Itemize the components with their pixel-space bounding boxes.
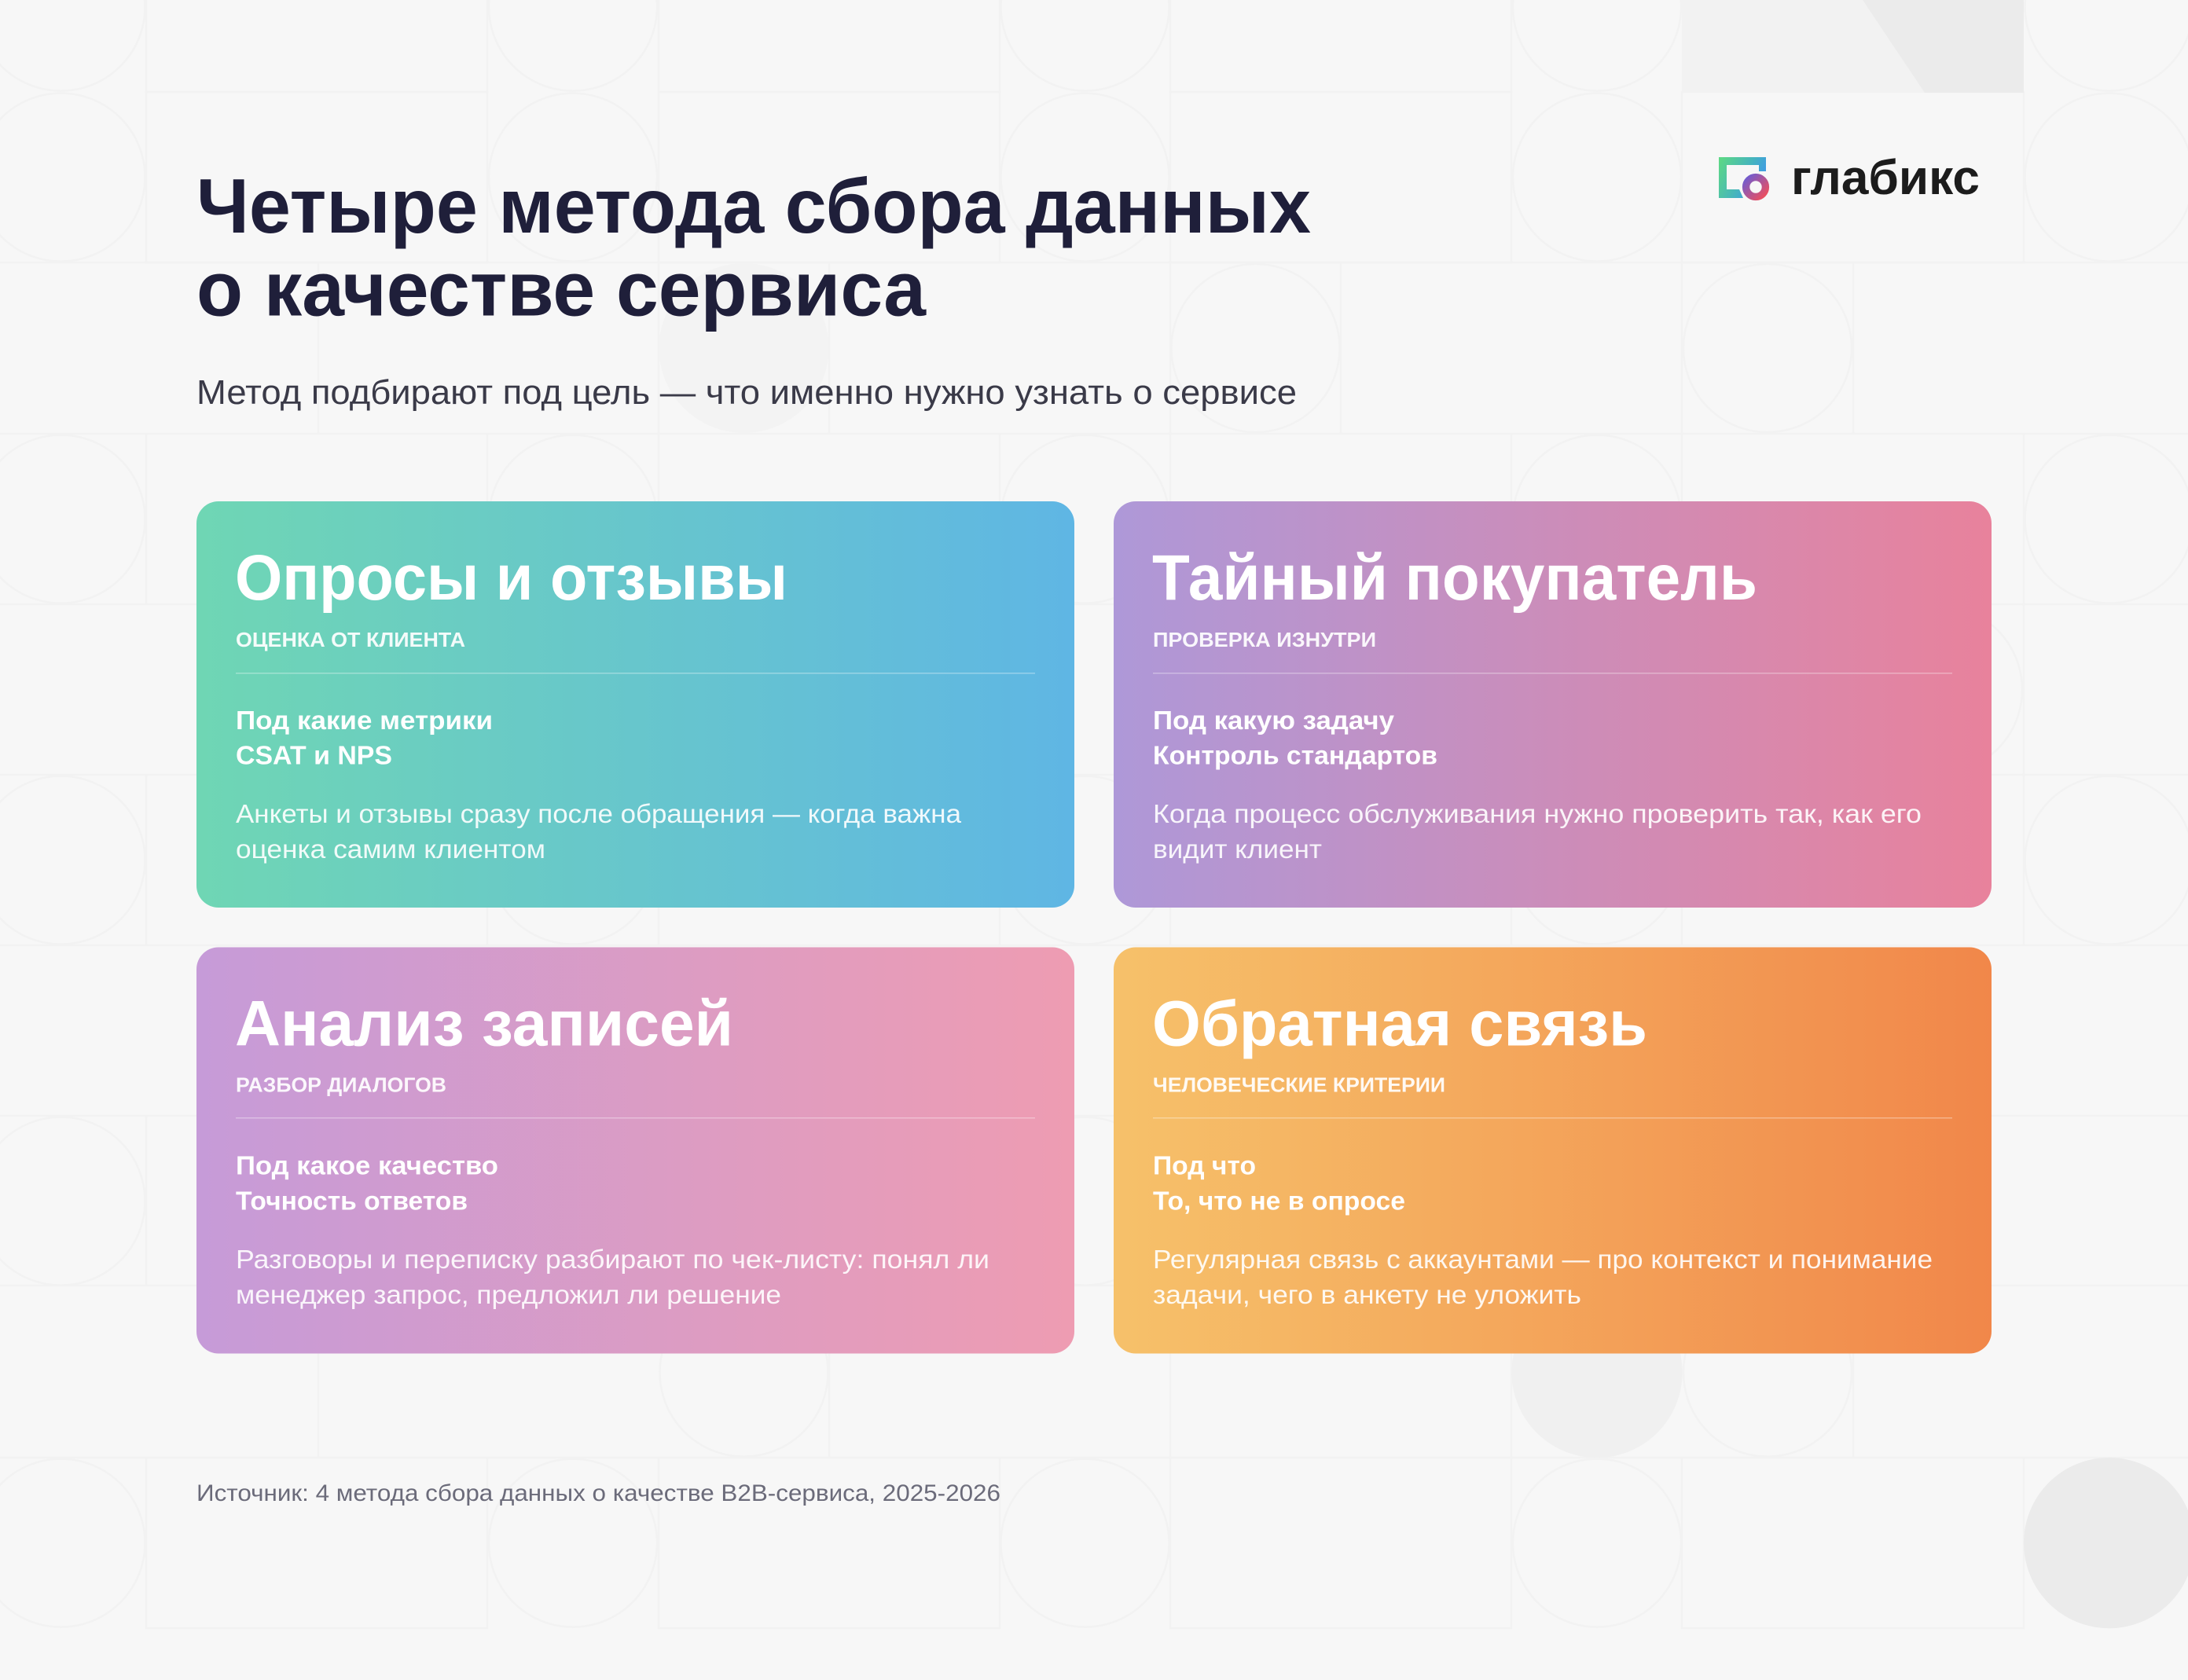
card description: видит клиент: [1153, 834, 1322, 864]
title: Четыре метода сбора данных: [196, 163, 1311, 249]
quality value: Точность ответов: [236, 1187, 468, 1215]
card description: оценка самим клиентом: [236, 834, 545, 864]
subtitle: Метод подбирают под цель — что именно нужно узнать о сервисе: [196, 373, 1297, 412]
card description: задачи, чего в анкету не уложить: [1153, 1280, 1581, 1309]
card description: менеджер запрос, предложил ли решение: [236, 1280, 781, 1309]
card heading: Опросы и отзывы: [235, 542, 787, 614]
title: [196, 163, 1311, 332]
quality label: Под какое качество: [236, 1150, 498, 1180]
logo wordmark: глабикс: [1791, 151, 1980, 205]
card description: Регулярная связь с аккаунтами — про контекст и понимание: [1153, 1245, 1933, 1274]
card subheading: РАЗБОР ДИАЛОГОВ: [236, 1073, 446, 1097]
purpose label: Под что: [1153, 1150, 1256, 1180]
card description: [236, 799, 962, 864]
task value: Контроль стандартов: [1153, 740, 1437, 770]
panel: mystery shopper: [1114, 501, 1992, 908]
card description: Когда процесс обслуживания нужно проверить так, как его: [1153, 799, 1922, 828]
card heading: Тайный покупатель: [1152, 542, 1757, 614]
source note: Источник: 4 метода сбора данных о качестве B2B-сервиса, 2025-2026: [196, 1480, 1000, 1506]
card description: [236, 1245, 989, 1309]
logo: [1719, 151, 1980, 205]
title: о качестве сервиса: [196, 245, 927, 332]
purpose value: То, что не в опросе: [1153, 1187, 1405, 1215]
card heading: Анализ записей: [235, 989, 733, 1059]
panel: recording analysis: [196, 948, 1074, 1353]
card subheading: ОЦЕНКА ОТ КЛИЕНТА: [236, 628, 465, 651]
panel: surveys and reviews: [196, 501, 1074, 908]
card subheading: ЧЕЛОВЕЧЕСКИЕ КРИТЕРИИ: [1153, 1073, 1445, 1097]
card subheading: ПРОВЕРКА ИЗНУТРИ: [1153, 628, 1376, 651]
card description: [1153, 1245, 1933, 1309]
icon: logo mark: [1719, 157, 1766, 198]
card description: Анкеты и отзывы сразу после обращения — когда важна: [236, 799, 962, 828]
card description: Разговоры и переписку разбирают по чек-листу: понял ли: [236, 1245, 989, 1274]
task label: Под какую задачу: [1153, 706, 1395, 735]
metric value: CSAT и NPS: [236, 740, 392, 770]
panel: feedback: [1114, 948, 1992, 1353]
card heading: Обратная связь: [1152, 989, 1647, 1059]
metric label: Под какие метрики: [236, 706, 493, 735]
card description: [1153, 799, 1922, 864]
